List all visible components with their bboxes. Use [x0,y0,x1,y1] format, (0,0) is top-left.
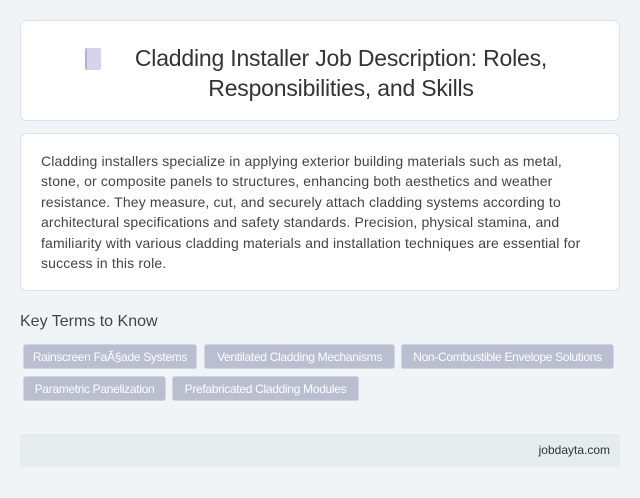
description text: Cladding installers specialize in applying exterior building materials such as metal, [41,153,562,169]
description text: stone, or composite panels to structures, enhancing both aesthetics and weather [41,173,552,189]
tags: Ventilated Cladding Mechanisms [217,350,382,364]
tags: Parametric Panelization [35,382,154,396]
description text: success in this role. [41,255,166,271]
tags: Non-Combustible Envelope Solutions [413,350,602,364]
icon: document [85,48,101,70]
footer: jobdayta.com [539,443,610,457]
description text: familiarity with various cladding materials and installation techniques are essential for [41,235,580,251]
heading: key terms: Key Terms to Know [20,313,158,330]
description text: resistance. They measure, cut, and securely attach cladding systems according to [41,194,561,210]
description text [41,153,580,271]
description card [20,133,620,291]
footer [20,434,620,467]
title: Cladding Installer Job Description: Roles, Responsibilities, and Skills [135,45,547,101]
description text: architectural specifications and safety standards. Precision, physical stamina, and [41,214,559,230]
tags: Prefabricated Cladding Modules [185,382,346,396]
header card [20,20,620,121]
tags: Rainscreen FaÃ§ade Systems [33,350,187,364]
